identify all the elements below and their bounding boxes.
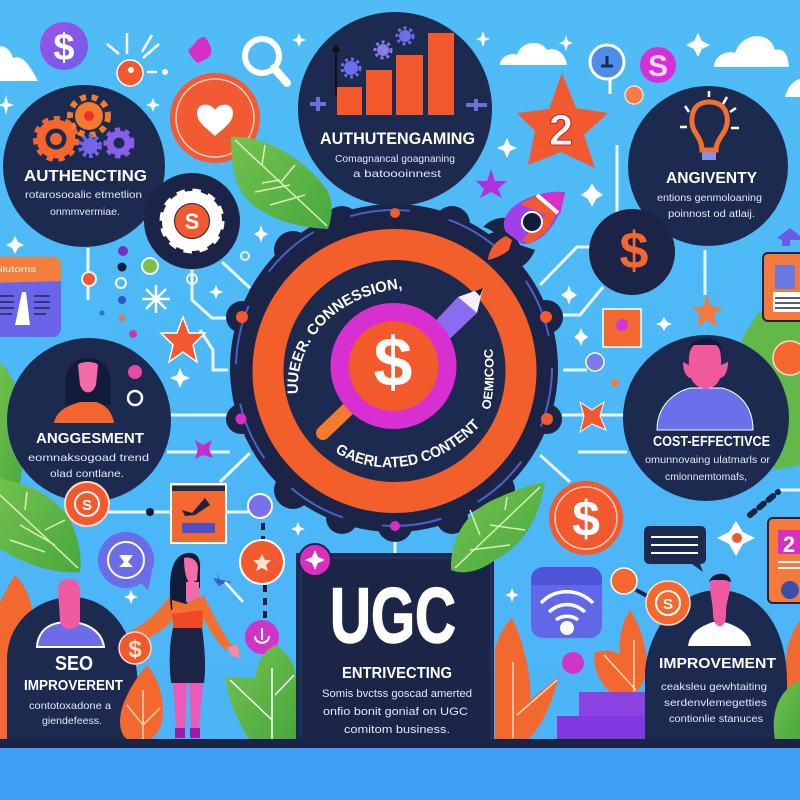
node: magenta badge [245, 620, 279, 654]
body text [657, 192, 762, 220]
icon: small purple star [476, 169, 507, 198]
icon: magnifier [245, 39, 287, 83]
icon: small orange coin [625, 86, 643, 104]
body text: entions genmoloaning [657, 192, 762, 204]
icon: small star right [692, 295, 722, 327]
icon: gear badge [144, 173, 240, 269]
body text: Somis bvctss goscad amerted [322, 688, 472, 700]
leaf: orange under coin [120, 665, 163, 740]
body text [25, 189, 142, 218]
face [184, 557, 198, 584]
icon: magenta dollar badge [640, 47, 676, 83]
pencil [425, 288, 483, 350]
body text: contionlie stanuces [669, 713, 763, 725]
body text: rotarosooalic etmetlion [25, 189, 142, 201]
icon: orange badge right edge [773, 341, 800, 375]
panel: left browser card [0, 257, 61, 337]
icon: small orange star [580, 402, 606, 432]
body text [335, 153, 455, 180]
body text: serdenvlemegetties [664, 697, 767, 709]
body text: cmlonnemtomafs, [665, 471, 747, 483]
leaf: top centre [231, 137, 332, 229]
node: orange star badge [240, 540, 284, 584]
gear studs [236, 208, 553, 531]
magenta ring [340, 312, 448, 420]
node: purple [248, 494, 272, 518]
heading: IMPROVEMENT [659, 655, 776, 672]
icon: chat bubble target [98, 532, 154, 590]
icon: magnifier coin [611, 568, 690, 625]
cloud: right edge [785, 79, 800, 97]
heading: AUTHUTENGAMING [320, 129, 475, 148]
icon: wifi card [531, 567, 602, 638]
body text: a batoooinnest [353, 168, 441, 180]
arms [128, 592, 178, 642]
leaf: orange right of steps [594, 610, 647, 692]
body text [645, 454, 771, 483]
body text: omunnovaing ulatmarls or [645, 454, 771, 466]
ring caption: GAERLATED CONTENT [336, 418, 478, 468]
heading: ANGIVENTY [666, 170, 757, 187]
body text [28, 452, 149, 480]
icon: magenta star [195, 440, 213, 459]
heading: UGC: UGC [330, 571, 456, 659]
icon: dollar badge left [65, 482, 109, 526]
body text: onmmvermiae. [50, 206, 120, 218]
panel: right number card [768, 518, 800, 603]
small dots column [82, 246, 619, 516]
body text: poinnost od atlaij. [668, 208, 755, 220]
panel: central gear [226, 204, 563, 542]
body text: olad contlane. [50, 468, 124, 480]
icon: light bulb [680, 91, 739, 160]
icon: gear badge: S [185, 209, 199, 234]
icon: purple up arrow [777, 228, 800, 246]
right leaf background [733, 280, 800, 470]
icon: star with number 2 [517, 73, 608, 168]
shoes [175, 728, 200, 738]
legs [173, 683, 203, 728]
icon: person [37, 579, 104, 647]
ring caption [287, 278, 494, 468]
leaf: green beside woman [225, 645, 296, 740]
icon: dollar badge left: S [82, 497, 92, 514]
gear body [226, 197, 563, 542]
icon: purple dollar badge: $ [53, 27, 75, 69]
body text [322, 688, 472, 736]
icon: person [688, 574, 751, 646]
dollar sign: $ [374, 323, 412, 401]
subheading: ENTRIVECTING [342, 665, 452, 682]
leaf: orange far right [786, 620, 800, 700]
gear accents [236, 210, 552, 526]
dotted connector right [750, 492, 778, 515]
cloud: top left [0, 46, 38, 81]
panel: right card [763, 253, 800, 321]
icon: orange dollar coin [549, 481, 623, 555]
heading: ANGGESMENT [36, 430, 144, 447]
icon: magenta pill [562, 652, 584, 674]
hair [170, 553, 200, 610]
sparkles [0, 31, 710, 604]
bottom band [0, 748, 800, 800]
icon: burst light [107, 33, 168, 86]
heading: SEO [55, 653, 93, 675]
ring caption: UUEER. CONNESSION, [287, 278, 402, 394]
figure: woman [128, 553, 240, 738]
body text: ceaksleu gewhtaiting [661, 681, 767, 693]
body text [661, 681, 767, 725]
leaf: left lower [0, 478, 81, 572]
leaf: green bottom right [774, 680, 800, 740]
icon: man portrait [657, 338, 753, 430]
icon: dollar badge dark: $ [620, 222, 649, 280]
icon: sparkle burst [142, 285, 170, 313]
leaf: orange left [0, 575, 33, 740]
panel: ugc [296, 553, 494, 743]
body text: contotoxadone a [29, 700, 111, 712]
icon: purple steps [557, 692, 647, 740]
icon: woman portrait [54, 358, 114, 423]
bottom bar [0, 739, 800, 748]
connector lines [88, 145, 800, 555]
panel: right number card: 2 [783, 532, 795, 557]
panel: improvement [645, 574, 787, 740]
body text [29, 700, 111, 727]
icon: plane [213, 571, 243, 602]
ring caption: OEMICOC [482, 349, 494, 409]
icon: heart badge [170, 73, 260, 163]
heading: AUTHENCTING [24, 168, 147, 185]
icon: orange square tile [603, 309, 641, 347]
top [172, 597, 205, 628]
icon: orange star [161, 317, 205, 362]
leaf: left upper [0, 360, 25, 490]
panel: anggesment [7, 338, 171, 502]
orange ring [268, 244, 521, 498]
icon: chat bubble [644, 526, 706, 572]
icon: location pin [590, 45, 624, 94]
icon: coin in hand: $ [128, 636, 142, 663]
icon: dollar badge dark [589, 209, 675, 295]
panel: seo improvement [7, 579, 138, 740]
body text: onfio bonit goniaf on UGC [323, 706, 468, 718]
rocket [483, 192, 565, 270]
icon: magnifier coin: S [663, 596, 673, 613]
icon: magenta gem [188, 37, 211, 63]
bar chart [310, 28, 487, 115]
skirt [170, 628, 205, 683]
body text: Comagnancal goagnaning [335, 153, 455, 165]
badge: ugc sparkle [299, 544, 331, 576]
panel: authutengaming [298, 12, 492, 206]
cloud: top right [714, 36, 789, 67]
icon: gears [36, 97, 132, 159]
panel: left browser card: iiutoms [0, 265, 36, 274]
icon: orange dollar coin: $ [572, 491, 600, 547]
icon: four-point sparkle [717, 521, 755, 556]
leaf: orange pair [495, 618, 558, 740]
magnifier handle [323, 410, 347, 433]
panel: cost-effective [623, 335, 789, 501]
cloud: top centre right [500, 43, 567, 65]
icon: star with number 2: 2 [549, 106, 573, 155]
panel: authenticating [3, 85, 165, 247]
panel: angiventy [628, 86, 788, 246]
node: dashed connector [263, 523, 265, 618]
icon: purple dollar badge [40, 22, 88, 70]
body text: giendefeess. [42, 715, 102, 727]
body text: eomnaksogoad trend [28, 452, 149, 464]
heading: COST-EFFECTIVCE [653, 434, 770, 450]
subheading: IMPROVERENT [24, 677, 123, 694]
body text: comitom business. [344, 724, 450, 736]
icon: browser tile [171, 484, 226, 543]
icon: coin in hand [119, 632, 151, 664]
icon: magenta dollar badge: S [648, 50, 668, 83]
leaf: green centre [451, 482, 545, 572]
